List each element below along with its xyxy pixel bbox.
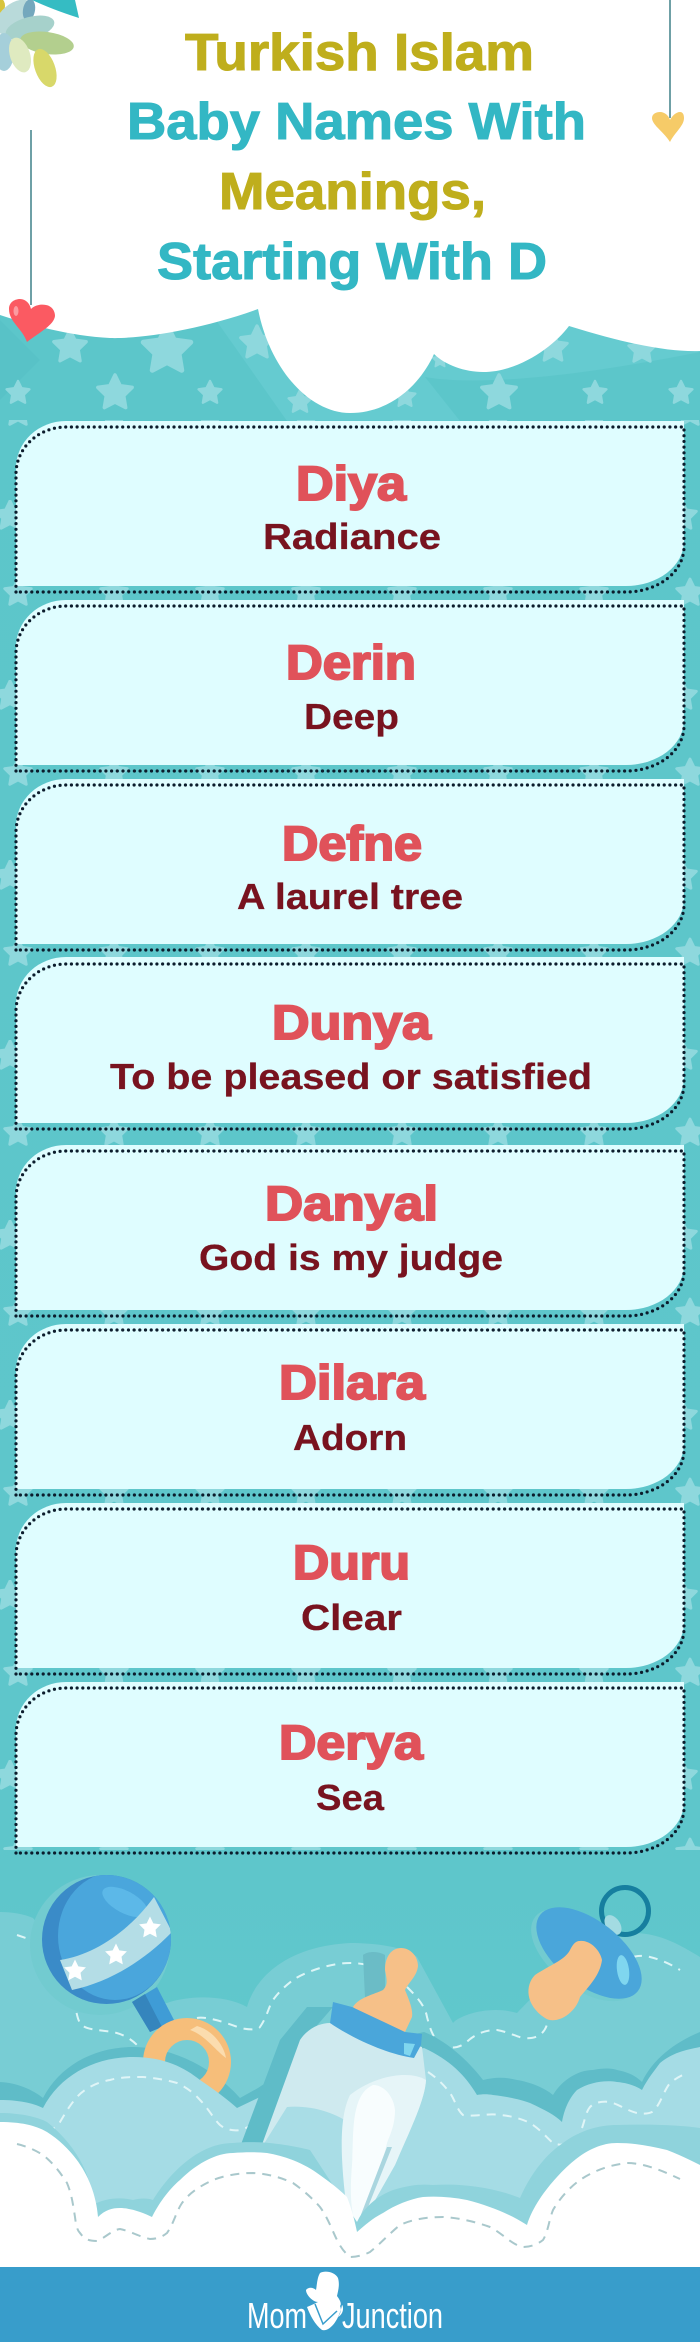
icon: rattle [30,1872,226,2095]
title: Starting With D [157,233,547,291]
panel: Dilara: Adorn [293,1417,407,1458]
dashed line: lower [17,2144,680,2257]
background facets [0,300,700,421]
panel: Diya: Radiance [263,516,441,557]
dashed line: upper [17,1935,680,2047]
string and heart: right [652,0,684,142]
panel: Diya [16,421,684,592]
icon: watercolour leaves [0,0,75,90]
corner bunting [32,0,79,18]
panel: Defne [16,779,684,950]
title: Baby Names With [127,93,586,151]
panel: Duru [16,1503,684,1674]
MomJunction logo [247,2272,443,2336]
icon: baby bottle [237,1948,426,2232]
panel: Defne: A laurel tree [237,876,463,917]
panel: Dilara [16,1324,684,1495]
title: Meanings, [219,163,486,221]
panel: Danyal [16,1145,684,1316]
panel: Derya [16,1682,684,1853]
background stars: behind cards [0,420,700,1850]
white cloud header [0,0,700,413]
background stars: header [7,325,692,412]
back cloud layer [0,1912,700,2200]
cloud layer: white foreground [0,2122,700,2267]
title [127,24,586,291]
title: Turkish Islam [185,24,534,82]
MomJunction logo: Junction [342,2295,443,2336]
panel: Derya: Derya [279,1717,423,1770]
panel: Dilara: Dilara [279,1357,425,1410]
panel: Duru: Duru [293,1537,410,1590]
panel: Dunya: To be pleased or satisfied [110,1056,592,1097]
cloud layer: light [0,2047,700,2300]
panel: Defne: Defne [282,818,422,871]
panel: Dunya [16,957,684,1129]
cloud layer: dark strip [0,2032,700,2300]
icon: pacifier [515,1888,658,2020]
panel: Dunya: Dunya [272,997,431,1050]
panel: Derin: Derin [286,637,416,690]
panel: Danyal: God is my judge [199,1237,503,1278]
MomJunction logo: Mom [247,2295,307,2336]
panel: Danyal: Danyal [265,1178,438,1231]
panel: Derya: Sea [316,1777,385,1818]
panel: Derin [16,600,684,771]
cloud layer: mid band [0,2113,700,2300]
panel: Duru: Clear [301,1597,402,1638]
footer bar [0,2267,700,2342]
panel: Derin: Deep [304,696,399,737]
panel: Diya: Diya [296,458,406,511]
string and heart: left [9,130,55,342]
dashed line: middle [47,2072,685,2145]
